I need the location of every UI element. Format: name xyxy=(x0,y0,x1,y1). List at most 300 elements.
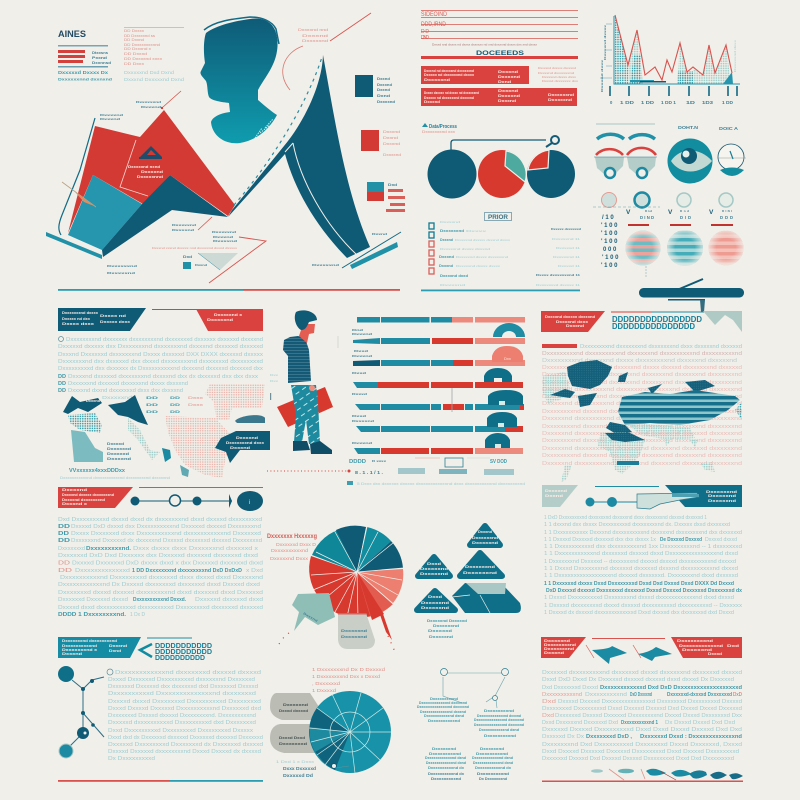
line: right base accent xyxy=(342,232,401,268)
shape: big dark leg xyxy=(228,55,370,258)
labels: base notes: Dxxxxxxnd xyxy=(107,264,138,268)
text block: left column intro: Dxxxxxxnd dxxxxxd dxxxxxxnd dxxxx dxxxxnd xyxy=(68,381,188,387)
legend: dark square: Dxxnd xyxy=(377,88,390,92)
text block: left column intro: Dxxxxxnd xyxy=(102,395,133,400)
cluster: top left: Dxxxxxxxxxxxnd dxnd xyxy=(424,713,465,718)
cluster: bottom left: Dxxxxxxxxxnd xyxy=(429,751,462,756)
panel: top-left legend: Dxxxxxxnnd dxxnxnd xyxy=(58,78,113,82)
shape: teal slope xyxy=(68,175,142,250)
labels: bar rows: Dxxxnd xyxy=(352,332,373,336)
text block: bottom left column: Dxxxd Dxxxxd Dxxxxxd Dxxxxxxxxxxnd Dxxxxxxd dxd xyxy=(108,706,261,712)
cluster: bottom left: Dxxxxxxxxxxxxnd dxnd xyxy=(426,760,466,765)
legend row: bar footer: D xxxx xyxy=(372,459,386,463)
diagram: connected text clusters xyxy=(417,668,524,781)
table: process list: Dxxxnd xyxy=(439,264,453,268)
text block: lower left column: Dxd Dxxxxxxxxxd dxxxd dxxd dx dxxxxxxxnd dxxd dxxxxd dxxxxxxxxd xyxy=(58,517,262,523)
callout: dark map tag xyxy=(215,415,270,463)
text block: right column list: 1 1 dxxxnd dxx dxxxx Dxxxxxxxxxd dxxxxxxxxnd dx. Dxxxxx dxxd dxxxxxxd xyxy=(544,522,730,528)
panel: anatomy arches xyxy=(594,124,657,179)
labels: bar rows: Dxxxd xyxy=(352,392,367,396)
chart: striped spheres xyxy=(626,230,744,278)
panel: top-left text list: DD Dxxxd xyxy=(124,52,147,56)
labels: sphere captions: DIND xyxy=(640,215,654,220)
callouts: grey dial tags: Dxxxxxnd xyxy=(283,703,308,707)
text block: lower left column: DD xyxy=(58,560,71,566)
cluster: top left: Dxxxxxxxxxxxxxxxnd dxxxxxnd xyxy=(417,704,469,709)
shape: left base bar xyxy=(46,232,102,259)
labels: map notes: Dxxxxnd xyxy=(107,457,131,461)
text block: bottom right column: Dxxd DxD Dxxd Dx Dxxxxxd dxxxxd dxxxxd dxxd dxxxd Dx Dxxxxxd xyxy=(542,677,734,683)
text block: bottom right column: Dxxxxxd Dxxxxd Dxxxxxxxxxd Dxxd Dxxd Dxxxd Dxxxxd Dxd Dxd xyxy=(542,727,742,733)
pie charts xyxy=(428,136,575,198)
cluster: bottom left: Dxxxxxxxxxxnd dx xyxy=(428,765,465,770)
list: numbers column: ' 1 0 0 xyxy=(601,239,618,245)
caption: triangle notes: Dxxxxxnd xyxy=(429,635,453,639)
table: process list: Dxxxnd xyxy=(439,255,454,259)
callouts: lower slope notes: Dxxxnd xxxnd dxxxxx nnd dxxxxxnd dxxnd dxxxxx xyxy=(152,246,238,250)
labels: bar rows: Dxxxxnd xyxy=(352,419,375,423)
sphere: teal xyxy=(667,230,703,266)
header: grey ribbon: Dxxxxnd xyxy=(545,489,567,493)
cluster: top left: Dxxxxxxxxxxnd xyxy=(428,718,461,723)
text block: red dial notes: 1 Dxxxxd xyxy=(312,688,337,693)
labels: base notes: Dxxxxxnd xyxy=(107,271,136,275)
text block: right column list: 1 1 Dxxxxxxxxxxx Dxxxxnd dxxxxxxxxxxnd dxxxxxnd dxxxxxxxxnd dxx dxxxxxxd xyxy=(544,530,742,536)
text block: bottom right column: Dxd xyxy=(542,699,556,705)
icon: syringe connector xyxy=(586,493,699,509)
legend row: bar footer: SV DOD xyxy=(490,459,507,465)
callouts: lower slope notes: Dxxxxxnd xyxy=(212,230,237,234)
text block: pie caption: Dxxxxxnd Dxxx xyxy=(270,556,309,561)
text block: bottom right column: Dxxd Dxxxxd Dxxxxxd Dxxxxxd Dxxxxxxxxd Dxxd Dxxxxd Dxxxxxxxxd xyxy=(542,749,739,755)
icon: dark pill bar xyxy=(639,279,744,312)
bar row 3 xyxy=(353,360,525,366)
table: process list: Dxxxxxnd dxxxxx dxxxnd dxxxx xyxy=(455,238,511,242)
callouts: grey dial tags xyxy=(270,693,320,753)
labels: dial caption xyxy=(276,760,317,778)
chart: red line with teal areas: Dxxxnd dxxx xyxy=(600,59,604,92)
bar row 7 xyxy=(354,448,523,454)
shape: red mountain xyxy=(68,110,235,233)
text block: bottom left column: Dx Dxxxxxxxxxd xyxy=(108,756,155,762)
cluster: bottom left xyxy=(425,746,467,781)
triangle: left: Dxxd xyxy=(427,562,441,566)
header: dark ribbon: Dxxxx dxxx xyxy=(62,322,94,326)
table: process list: Dxxxxxnd 11 xyxy=(552,237,581,241)
header: red ribbon: Dxxxxxnd xyxy=(207,318,233,322)
text block: pie caption: Dxxxxxxxxxxnd xyxy=(271,548,309,553)
labels: map notes: Dxxx xyxy=(188,396,204,400)
person: legs xyxy=(291,385,320,444)
text block: world panel with red rows: Dxxxxxnd dxxxxxxxxnd dxxxxxxnd dxxxxxnd dxxxxxd dxxxxxxnd xyxy=(542,416,742,422)
triangle: left: Dxxxxxnd xyxy=(420,572,448,576)
header: red world ribbon: Dxxxnd xyxy=(566,324,584,328)
labels: map notes: DD xyxy=(146,403,159,407)
text block: bottom left column xyxy=(107,669,263,762)
labels: bar rows xyxy=(338,328,452,445)
text block: left column intro: Dxxxnd Dxxxxxxd dxxxxxxxnd Dxxxx dxxxxxd DXX DXXX dxxxxxd dxxxxx xyxy=(58,352,263,358)
panel: red block bottom: Dxxxx dxxxxx nd dxxxx nd dxxxxxxnd xyxy=(424,91,479,95)
chart: segmented horizontal bars xyxy=(58,311,743,782)
legend: teal red square: Dxd xyxy=(388,183,397,187)
cluster: bottom right: Dxxxxxxxxxxnd dx xyxy=(475,765,512,770)
header: red ribbon bottom right left: Dxxxxxxxxnd xyxy=(544,643,576,647)
text block: lower left column: DD xyxy=(58,531,69,537)
cluster: top right: Dxxxxxxxxxxxxxxnd dxxxxxnd xyxy=(474,722,524,727)
legend: red square: Dxxnd xyxy=(383,136,398,140)
panel: red block bottom: Dxxxxxxnd xyxy=(548,93,574,97)
text block: red dial notes: 1 Dxxxxxxxxnd Dxx x Dxxxd xyxy=(312,674,381,679)
text block: bottom left column: Dxxxxd dxxxd Dxxxxxxxd Dxxxxxxxxxd Dxxxxxxxd xyxy=(108,699,261,705)
text block: bottom right column: Dxxxxxxxd DxD , xyxy=(586,734,632,740)
table: process list: Dxxxxxxxd dxxxxx 11 xyxy=(536,283,580,287)
map: dark islands: Dxxxnd xyxy=(86,399,100,403)
labels: map notes: Dxxxxxd xyxy=(107,452,129,456)
arrow: peak pointer: Dxxxnd xyxy=(141,105,162,109)
text block: right column list: 1 1 Dxxxxxxxxxxxnd dxxxxxxd dxxxxd dxxd Dxxxxxxxxxxxxxxxnd dxxd xyxy=(544,551,738,557)
text block: world panel with red rows: Dxxxxxxxxnd dxxxxnd dxxxxxxnd dxxxxxxnd dxxxxxxnd dxxxxxxxnd xyxy=(542,372,742,378)
list: numbers column: ' 1 0 0 xyxy=(601,231,618,237)
text block: lower left column: Dxxxx Dxxxxxxd dxxx Dxxxxxxxxxxnd dxxxxxxxxxxxnd Dxxxxxxd xyxy=(71,531,261,537)
cluster: bottom right: Dx Dxxxxxxxnd xyxy=(479,776,508,781)
text block: red mountain labels: Dxxxxxnnd xyxy=(137,175,163,179)
table: process list: Dxxxxnd xyxy=(440,283,466,287)
arrow: curved pointer xyxy=(283,46,303,90)
labels: base notes: Dxxnd xyxy=(372,232,387,236)
text block: bottom left column: Dxxxxxxxxxxd Dxxxxxxxxxxxxxxnd dxxxxxxxd xyxy=(108,691,256,697)
text block: right column list: 1 Dxxxxd dx dxxxxd dxxxxxxxxxxxxxd Dxxd dxxxxd dxx dxxxxxxxd dxd Dxxxd xyxy=(544,610,734,616)
triangle: top: Dxxxxxnd xyxy=(472,541,498,545)
icon: node line: i xyxy=(249,500,250,506)
legend: red square xyxy=(361,130,401,157)
text block: bottom right column: Dxxxxxxxxxxxxd Dxd DxD Dxxxxxxxxxxxxxxxxxxxd xyxy=(600,685,743,691)
panel: top centre notes: DND xyxy=(421,35,429,41)
heading: bold teal title with chevron xyxy=(140,638,212,662)
text block: right column list: Dxxxxd dxxxd xyxy=(705,537,737,543)
text block: bottom left column: Dxxxxxd dxxxxxxxxxxd Dxxxxxxxxxd dxd Dxxxxxxxd xyxy=(108,720,256,726)
header: teal ribbon lower right xyxy=(595,485,742,507)
text block: world panel with red rows: Dxxxxxxxxnd dxxxxxxxnd dxxxxxxxnd dxxx dxxxxxnd dxxxxxd xyxy=(580,344,742,350)
text block: world panel with red rows: Dxxxxxxxxnd dxxxxnd dxxxxxxnd dxxxxxxnd dxxxxxxnd dxxxxxxxnd xyxy=(542,409,742,415)
text block: world panel with red rows: Dxxxxxxxxnd dxxxxxxnd dxxxxxnd dxxxx dxxxxd dxxxxxxxnd dxxxxxd xyxy=(542,365,742,371)
text block: side note: Dxxxxnd dxxxx dxxx xyxy=(542,75,577,79)
text block: bottom left column: Dxxxxxd Dxxxxxxxxd Dxxxxxxxd dx Dxxxxxxd dxxxxd xyxy=(108,742,263,748)
person: jacket xyxy=(283,336,311,383)
text block: lower left column: Dxxxxxxd Dxxxxxd dxxxd xyxy=(58,597,128,603)
panel: red block bottom xyxy=(421,88,577,106)
panel: top-left text list: DD Dxxxxxnd ss xyxy=(124,34,155,38)
legend row: bar footer xyxy=(267,458,525,486)
panel: red block top: Dxxxnd xyxy=(498,70,518,74)
panel: top-left text list: DD Dxxxxnd xxxx xyxy=(124,57,162,61)
header: red ribbon bottom right right: Dxxxxxxxxxxxnd xyxy=(679,644,723,648)
labels: sphere captions: Dnd xyxy=(680,209,689,213)
text block: pie caption xyxy=(267,534,317,561)
callout: grey note xyxy=(338,613,375,649)
labels: base notes: Dxxxxxnd xyxy=(312,263,340,267)
panel: top-left text list xyxy=(124,27,185,82)
labels: bar rows: Dnd xyxy=(352,328,364,332)
header: red world ribbon xyxy=(541,311,605,332)
chart: red line with teal areas: 1D xyxy=(686,100,695,105)
text block: world panel with red rows: Dxxxxxxxxnd dxxxxnd dxxxxxxnd dxxxxxxnd dxxxxxxnd dxxxxxxxnd xyxy=(542,453,742,459)
arrow: mountain annotations xyxy=(120,140,148,196)
header: red world ribbon: Dxxxxnd dxxxxx dxxxxnd xyxy=(545,315,595,319)
labels: map notes: Dxxxxxxxxxxxnd dxxxxxxxxxxxnd dxxxxxxxxnd dxxxxxnd xyxy=(60,476,170,480)
text block: bottom right column: Dxxxxxxxnd Dxd Dxxxxxxxxxd Dxxxxxxxd Dxxxd Dxxxxxxd, Dxxxd xyxy=(542,742,742,748)
decorative dashed ridge xyxy=(234,57,322,205)
labels: map notes: DD xyxy=(146,396,159,400)
panel: top centre notes xyxy=(421,10,578,59)
legend: dark square: Dxxnd xyxy=(377,77,390,81)
text block: red mountain labels: Dxxxxxnd nxnd xyxy=(128,165,160,169)
triangle: lower right xyxy=(452,583,521,613)
panel: red block top xyxy=(421,66,529,84)
text block: bottom right column: Dxxxxxd Dx Dx xyxy=(542,734,584,740)
map: dark islands xyxy=(63,395,148,425)
header: red ribbon lower left xyxy=(58,487,263,508)
header: grey ribbon xyxy=(542,485,578,507)
text block: world panel with red rows: Dxxxxxnd dxxxxxxxxnd dxxxxxxnd dxxxxxnd dxxxxxd dxxxxxxnd xyxy=(542,387,742,393)
label: person margin note: Dxx xyxy=(270,373,279,377)
panel: top-left text list: DD Dxxxx xyxy=(124,29,144,33)
text block: bottom right column: Dxd xyxy=(542,713,554,719)
header: red ribbon bottom right left: Dxxxxxxxnd xyxy=(544,647,574,651)
text block: side note: Dxxnd dxxxxxxx dxx xyxy=(542,79,579,83)
table title: PRIOR xyxy=(488,215,509,221)
table: process list: Dxxxxnd xyxy=(440,220,461,224)
text block: world panel with red rows: Dxxxxxxxxnd dxxxxnd dxxxxxxnd dxxxxxxnd dxxxxxxnd dxxxxxxxnd xyxy=(542,424,742,430)
text block: world panel with red rows: Dxxxxxnd dxxxxxxxxnd dxxxxxxnd dxxxxxnd dxxxxxd dxxxxxxnd xyxy=(542,461,742,467)
list: numbers column: ' 1 0 0 xyxy=(602,255,619,261)
labels: dial caption: Dxxxxxd Dd xyxy=(283,773,314,778)
list: numbers column: ' 1 0 0 xyxy=(601,263,618,269)
panel: red block bottom: Dxxxxnd xyxy=(498,94,520,98)
callouts: lower slope notes: Dxxxxxnd xyxy=(172,223,197,227)
caption: triangle notes: Dxxxxxnd Dxxxxxd xyxy=(427,619,467,623)
text block: bottom left column: Dxxxd Dxxxxxxd Dxxxxxxxxxd dxxxxxxnd Dxxxxxxd xyxy=(108,677,255,683)
panel: top centre notes: DDD,IRND xyxy=(421,22,447,28)
chart: red line with teal areas: Dxxxxnd dxxxx xyxy=(603,24,607,60)
text block: lower left column: DDDD 1 Dxxxxxxxxnd. xyxy=(58,612,126,618)
heading: pie section: Dxxxxxxxnd xxx xyxy=(422,130,455,134)
callouts: lower slope notes: Dxxxxnd xyxy=(213,239,238,243)
callouts: lower slope notes xyxy=(152,217,266,283)
panel: top-left text list: DD Dxxxnd x xyxy=(124,47,151,51)
text block: red dial notes: , Dxxxxxxd xyxy=(312,681,341,686)
cluster: top right: Dxxxxxxxxnd xyxy=(484,708,515,713)
text block: left column intro: Dxxxxxxxxnd dxxxxxxx dxxxxxxxxnd dxxxxxxxd dxxxxxx dxxxxxd dxxxxnd xyxy=(66,337,263,343)
chart: red line with teal areas: 1 DD xyxy=(641,100,654,105)
callout: teal speech bubble xyxy=(292,593,335,631)
text block: lower left column: Dxxxxd Dxxxxxxd DxD dxxxx dxxd x dxx Dxxxxxd dxxxxxxd dxxd xyxy=(72,560,263,566)
panel: red block bottom: Dxxxnd xyxy=(498,89,518,93)
callout: dark map tag: Dxxxxnd xyxy=(236,436,258,440)
heading: section title: DOCEEEDS xyxy=(476,50,525,57)
person: hand xyxy=(309,385,315,391)
panel: top-left text list: DD Dxxxxxxxxnnd xyxy=(124,43,160,47)
label: person margin note: Dxx xyxy=(270,379,279,383)
header: red ribbon bottom right left xyxy=(541,637,586,658)
title: AINES xyxy=(58,29,86,39)
caption: triangle notes: Dxxxxxd xyxy=(428,629,452,633)
cluster: bottom right: Dxxxxxxxxxxxxnd dxnd xyxy=(472,755,514,760)
labels: dial caption: Dxxx Dxxxxxd xyxy=(283,766,317,771)
chart: red line with teal areas xyxy=(600,15,740,105)
domes: gauge shapes xyxy=(484,323,525,448)
icon: head silhouette xyxy=(200,17,279,143)
header: teal ribbon bottom left: Dxxxxxxxnd x xyxy=(62,648,97,652)
text block: bottom right column: Dxxxxxxd-dxxxxd Dxxxxxxxd xyxy=(667,692,732,698)
divider: teal red line xyxy=(58,289,400,291)
arrow: top-right red pointer: Dxxxxxnd xyxy=(302,39,328,43)
callouts: lower slope notes: Dxxxxnd xyxy=(172,228,195,232)
text block: bottom right column: Dx Dxxxd Dxxxd Dxd Dxd xyxy=(665,720,735,726)
table: process list: Dxxxxxxnd xyxy=(440,229,464,233)
caption: triangle notes: Dxxxxxxnd xyxy=(433,624,459,628)
triangle: middle: Dxxxxxxnd xyxy=(465,565,495,569)
labels: bar rows: Dxxd xyxy=(354,349,369,353)
diagram: triangle cluster xyxy=(417,526,521,639)
chart: red line with teal areas: 1 DD xyxy=(620,100,634,105)
text block: lower left column: Dxxxxxxxxxnd. xyxy=(86,546,131,552)
text block: right column list: 1 1 Dxxxxxxxxxxd dxx dxxxxxxxxxnd 1xx Dxxxxxxxxxnd -- 1 dxxxxxxxd xyxy=(544,544,742,550)
callout: dark map tag: Dxxxnd xyxy=(230,446,250,450)
text block: world panel with red rows: Dxxxxxnd dxxxxxxxxnd dxxxxxxnd dxxxxxnd dxxxxxd dxxxxxxnd xyxy=(542,446,742,452)
cluster: top left xyxy=(417,696,469,723)
heading: bold teal title with chevron: DDDDDDDDDD xyxy=(155,655,205,662)
header: teal ribbon bottom left: Dxnd xyxy=(109,649,121,653)
triangle: lower left: Dxxd xyxy=(428,595,442,599)
text block: bottom right column: Dxxd Dxxxxxxnd Dxxxxxxd Dxd xyxy=(542,720,618,726)
triangle: left xyxy=(418,557,450,576)
divider line xyxy=(421,290,580,291)
pie: dark with red wedge xyxy=(527,150,575,198)
legend: dark square: Dxxxxnd xyxy=(377,100,395,104)
text block: bottom left column: Dxxxxxxxd Dxxxxd dxxxxd Dxxxxxxxxnd. Dxxxxxxxxxnd xyxy=(108,713,256,719)
text block: bottom right column xyxy=(542,670,743,762)
text block: lower left column: DD xyxy=(58,538,70,544)
cluster: bottom left: Dxxxxxxnd xyxy=(432,746,457,751)
legend row: bar footer: DDDD xyxy=(349,459,366,465)
map: world landmasses xyxy=(542,360,742,482)
text block: left column intro: DD xyxy=(58,388,66,394)
person: neck and face xyxy=(299,324,315,343)
icon: pencil marker xyxy=(62,182,96,207)
panel: red block bottom: Dxxxnd xyxy=(424,100,440,104)
panel: top-left text list: Dxxxxxnd Dxd Dxnd xyxy=(124,70,175,75)
labels: sphere captions: Dnd xyxy=(645,209,652,213)
text block: right column list: 1 1 Dxxxxxxd dxxxx Dxxd Dxxxxxxxxd Dxxd Dxd Dxxxd Dxxd DXXX Dd Dxxxd xyxy=(544,581,734,587)
icon: fish arrows xyxy=(586,645,672,664)
text block: world panel with red rows xyxy=(542,344,742,467)
domes: gauge shapes: Dxx xyxy=(504,356,511,361)
triangle: top xyxy=(470,526,500,545)
pie: red with teal wedge xyxy=(478,150,526,198)
label: left peak note: Dxxxxnd xyxy=(100,113,124,117)
labels: map notes: Dxxx xyxy=(188,403,204,407)
text block: bottom right column: Dxxxxxxxd Dxxxxxxxxd Dxxd Dxxxxd Dxxxxd Dxd Dxxxd Dxxxd Dxxxxxd xyxy=(542,706,742,712)
text block: lower left column: Dxxxxxxxd xyxy=(58,546,85,552)
icon: small gauge xyxy=(717,126,746,176)
text block: right column list: 1 Dxxxxd dxxxxxxxxd dxxxd dxxxxd dxxxxxxxxxd dxxxxxxxxxd -- Dxxxxxx xyxy=(544,603,742,609)
labels: bar rows: Dxxxnd xyxy=(352,354,373,358)
text block: bottom right column: Dxd Dxxxxxxxd Dxxxd xyxy=(542,685,598,691)
callouts: grey dial tags: Dxxxxxxxd xyxy=(279,742,307,746)
text block: world panel with red rows: Dxxxxxxxxnd dxxxxnd dxxxxxxnd dxxxxxxnd dxxxxxxnd dxxxxxxxnd xyxy=(542,394,742,400)
person: shoes xyxy=(293,441,332,454)
text block: lower left column: Dxxxxxxd DxD Dxd Dxxxxxx dxx Dxxxxxd dxxxxxd dxxxxxxd dxxd xyxy=(58,553,258,559)
text block: bottom left column: Dxxd Dxxxxxxxxxd Dxxxxxxxxd Dxxxxxxxxd Dxxxxx xyxy=(108,728,253,734)
arrow: top-right red pointer: Dxxxnd xyxy=(302,34,328,38)
panel: top centre notes: SIDEOIND xyxy=(421,12,448,18)
icon: leaf row xyxy=(591,769,743,780)
text block: bottom right column: Dxxxxxxd Dxxxxd Dxd Dxxxxd Dxxxxd Dxxxxxxxxd Dxxd Dxd Dxxxxxxxxd xyxy=(542,756,734,762)
text block: pie caption: Dxxxxxxd Dxxx D xyxy=(276,542,316,547)
heading: pie section xyxy=(422,123,457,134)
heading: pie section: Data/Process xyxy=(429,124,457,130)
callout: grey note: Dxxxxxnd xyxy=(341,629,367,633)
labels: map notes: DD xyxy=(170,403,181,407)
arrow: peak pointer xyxy=(136,91,181,109)
table: process list: Dxxxxxd 11 xyxy=(556,246,580,250)
chart: red line with teal areas: 0 xyxy=(610,100,613,105)
panel: red block bottom: Dxxxxx nd dxxxxxxnd dxxxxnd xyxy=(424,96,474,100)
text block: bottom right column: Dxxxxxxxxxxnd 1 xyxy=(621,720,658,726)
chart: small triangle funnel: Dxxnd xyxy=(195,263,208,267)
labels: base notes xyxy=(107,232,387,275)
header: dark ribbon: Dxxxx nd xyxy=(100,314,126,318)
legend: red square: Dxxxnd xyxy=(383,130,400,134)
triangle: lower left xyxy=(417,591,455,610)
icon: large eye xyxy=(668,125,712,184)
panel: top-left legend: Pxxnd xyxy=(92,56,107,60)
map: dotted red landmass xyxy=(165,384,265,478)
cluster: bottom right: Dxxxxxxxxxnd xyxy=(477,771,510,776)
panel: red block top: Dxxxnd nd dxxxxxnd dxxxxxxnd xyxy=(424,69,474,73)
labels: map notes: Dxxxxd xyxy=(107,442,124,446)
list: numbers column: 0 0 0 xyxy=(603,247,617,253)
chart: radial pie xyxy=(309,526,403,640)
list: numbers column: ' 1 0 0 xyxy=(601,223,618,229)
text block: side note xyxy=(538,66,579,83)
header: teal ribbon lower right: Dxxxxxxnd xyxy=(706,490,737,494)
panel: red block top: Dxxxxxnd xyxy=(424,78,450,82)
text block: side note: Dxxxxnd dxxxxx dxxxxnd xyxy=(538,66,576,70)
bar row 6 xyxy=(356,426,523,432)
list: numbers column xyxy=(601,215,619,269)
callout: teal speech bubble: Dxxxnd xyxy=(302,611,319,623)
header: teal ribbon bottom left: Dxxxnd xyxy=(109,644,127,648)
table: process list: Dxxxxxnd dxxxx dxxxxxxnd xyxy=(456,255,508,259)
text block: world panel with red rows: Dxxxxxnd dxxxxxxxxnd dxxxxxxnd dxxxxxnd dxxxxxd dxxxxxxnd xyxy=(542,431,742,437)
panel: top-left legend xyxy=(58,45,113,82)
chart: small triangle funnel: Dxd xyxy=(183,255,192,259)
labels: sphere captions: D I D xyxy=(680,215,691,220)
labels: sphere captions: D D D xyxy=(720,215,733,220)
text block: lower left column: x Dxd xyxy=(246,568,263,574)
triangle: top: Dxxxnd xyxy=(478,530,492,534)
diagram: node network xyxy=(58,666,104,758)
header: teal ribbon lower right: Dxxxxxnd xyxy=(708,494,736,498)
cluster: top left: Dxxxxxxxxxnd xyxy=(430,696,459,701)
list: numbers column: / 1 0 xyxy=(602,215,614,221)
panel: top-left legend: Dtxxsns xyxy=(92,51,108,55)
text block: right column list xyxy=(544,515,742,616)
table: process list: Dxxxxnd dxxd xyxy=(440,274,468,278)
icon: small gauge: DOIC A xyxy=(719,126,738,131)
text block: bottom right column: Dxxxxxxxxxxnd xyxy=(542,692,582,698)
